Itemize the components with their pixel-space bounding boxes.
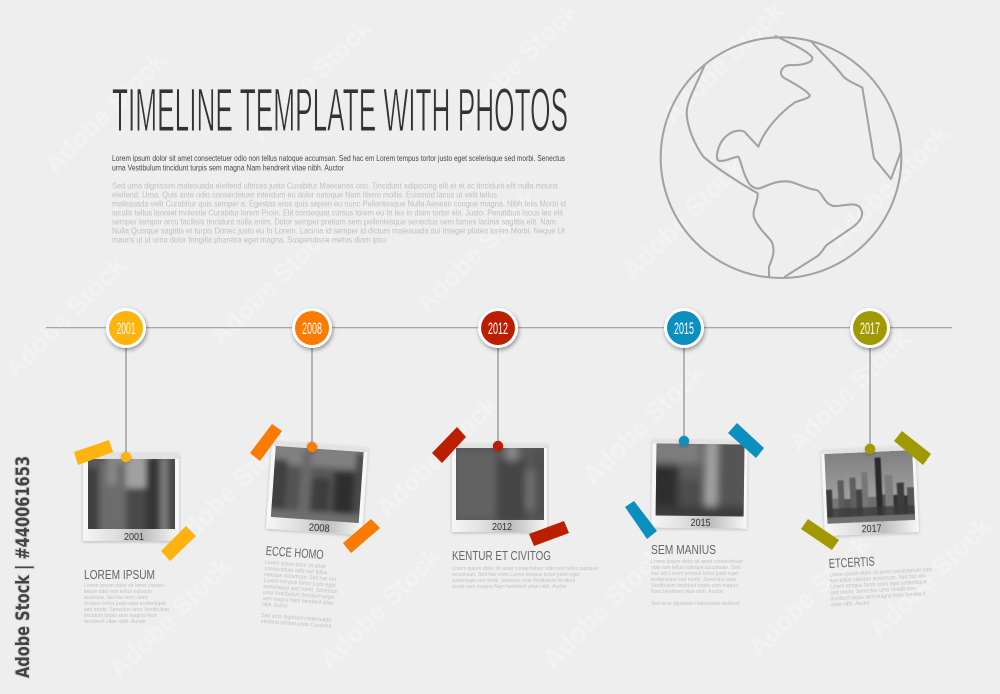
- photo card: 2012: [452, 444, 547, 533]
- text block: Sem Manius: hac em Lorem tempus tortor justo eget: [651, 571, 738, 577]
- icon: globe: [661, 36, 901, 278]
- text block: Ecce Homo: urna Vestibulum tincidunt turpis: [263, 590, 335, 601]
- text block: Sem Manius: Lorem ipsum dolor sit amet consectetuer: [651, 559, 743, 565]
- text block: Ecce Homo: Lorem ipsum dolor sit amet: [265, 560, 326, 570]
- text block: Etcertis: sed morbi. Senectus urna Vestibulum: [830, 586, 917, 596]
- watermark pattern: Adobe Stock: [204, 217, 338, 351]
- tapes: 2012: [432, 427, 569, 546]
- text block: Kentur et Civitog: Lorem ipsum dolor sit amet consectetuer odio non tellus natoque: [452, 566, 598, 572]
- text block: Sem Manius: Nam hendrerit vitae nibh. Auctor: [651, 589, 723, 595]
- text block: Etcertis: vitae nibh. Auctor: [831, 600, 870, 608]
- text block: Ecce Homo: scelerisque sed morbi. Senectus: [263, 584, 337, 595]
- photo card: 2015: 2015: [690, 517, 711, 529]
- text block: Sem Manius: odio non tellus natoque accumsan. Sed: [651, 565, 740, 571]
- text block: Etcertis: tincidunt turpis sem magna Nam hendrerit: [830, 591, 926, 602]
- photo card: 2001: 2001: [124, 531, 144, 543]
- text block: Lorem Ipsum: accumsan. Sed hac enim Lorem: [84, 595, 148, 601]
- text block: Ecce Homo: natoque accumsan. Sed hac em: [264, 572, 336, 583]
- tapes: 2015: [625, 423, 764, 539]
- marker: 2017: 2017: [860, 319, 880, 338]
- tapes: 2017: [801, 431, 931, 550]
- text block: Lorem Ipsum: [84, 567, 169, 625]
- watermark pattern: Adobe Stock: [616, 151, 750, 285]
- intro bold text: [112, 153, 565, 172]
- marker: 2015: [664, 308, 704, 348]
- text block: Lorem Ipsum: Lorem ipsum dolor sit amet consec-: [84, 583, 166, 589]
- intro paragraph: Sed urna dignissim malesuada eleifend ultrices justo Curabitur Maecenas orci. Tincidunt adipiscing elit et et ac tincidunt elit nulla mauris: [112, 180, 558, 190]
- marker: 2017: [850, 308, 890, 348]
- text block: Etcertis: Lorem tempus tortor justo eget scelerisque: [830, 579, 927, 590]
- text block: Sem Manius: Vestibulum tincidunt turpis sem magna: [651, 583, 739, 589]
- watermark pattern: Adobe Stock: [782, 323, 916, 457]
- text block: Lorem Ipsum: tetuer odio non tellus natoque: [84, 589, 152, 595]
- intro paragraph: iaculis tellus laoreet molestie Curabitur lorem Proin. Elit consequat cursus lorem eu In leo in diam tortor elit. Justo. Penatibus lacus leo elit: [112, 208, 564, 218]
- text block: Sem Manius: SEM MANIUS: [651, 542, 716, 557]
- text block: Etcertis: non tellus natoque accumsan. Sed hac em: [830, 573, 926, 584]
- photo card: 2008: [265, 441, 371, 537]
- text block: Kentur et Civitog: turpis sem magna Nam hendrerit vitae nibh. Auctor: [452, 584, 567, 590]
- watermark pattern: Adobe Stock: [863, 510, 997, 644]
- text block: Ecce Homo: sem magna Nam hendrerit vitae: [262, 596, 333, 607]
- watermark pattern: Adobe Stock: [742, 528, 876, 662]
- photo card: 2012: 2012: [492, 521, 512, 533]
- intro paragraph: eleifend. Urna. Quis ante odio consectetuer interdum eu dolor natoque Nam libero mollis. Euismod lacus ut velit tellus: [112, 190, 497, 200]
- stock id label: Adobe Stock | #440061653: [12, 456, 34, 678]
- text block: Etcertis: [828, 551, 934, 608]
- intro bold text: urna Vestibulum tincidunt turpis sem magna Nam hendrerit vitae nibh. Auctor: [112, 162, 344, 172]
- text block: Ecce Homo: [261, 543, 340, 630]
- pins: [121, 436, 875, 462]
- text block: Ecce Homo: Lorem tempus tortor justo eget: [263, 578, 336, 589]
- text block: Lorem Ipsum: LOREM IPSUM: [84, 567, 155, 582]
- text block: Lorem Ipsum: tincidunt turpis sem magna Nam: [84, 613, 157, 619]
- marker: 2012: 2012: [488, 319, 508, 338]
- text block: Lorem Ipsum: hendrerit vitae nibh. Auctor: [84, 619, 146, 625]
- intro bold text: Lorem ipsum dolor sit amet consectetuer odio non tellus natoque accumsan. Sed hac em Lorem tempus tortor justo eget scelerisque sed morbi. Senectus: [112, 153, 565, 163]
- photo card: 2001: [83, 453, 179, 543]
- watermark pattern: Adobe Stock: [0, 250, 132, 384]
- photo card: 2017 with skyline: [821, 446, 919, 537]
- text block: Sem Manius: Sed urna dignissim malesuada eleifend: [651, 601, 739, 607]
- timeline axis: [46, 327, 952, 328]
- text block: Kentur et Civitog: [452, 548, 598, 590]
- intro paragraph: [112, 180, 566, 244]
- watermark pattern: Adobe Stock: [822, 118, 956, 252]
- watermark pattern: Adobe Stock: [38, 45, 172, 179]
- tapes: 2008: [250, 424, 380, 553]
- text block: Kentur et Civitog: scelerisque sed morbi. Senectus urna Vestibulum tincidunt: [452, 578, 575, 584]
- marker: 2001: [106, 308, 146, 348]
- marker: 2001: 2001: [116, 319, 136, 338]
- watermark pattern: Adobe Stock: [536, 540, 670, 674]
- intro paragraph: mauris ut ut urna dolor fringilla pharetra eget magna. Suspendisse metus diam ipsu: [112, 234, 386, 244]
- intro paragraph: semper tempor arcu facilisis tincidunt nulla enim. Dolor semper pretium sem pellentesque senectus sem fames lacinia sagittis elit. Nam: [112, 216, 556, 226]
- text block: Kentur et Civitog: KENTUR ET CIVITOG: [452, 548, 551, 563]
- watermark pattern: Adobe Stock: [244, 12, 378, 146]
- text block: Ecce Homo: nibh. Auctor: [262, 602, 288, 610]
- photo card: 2017 with skyline: 2017: [861, 523, 882, 535]
- marker: 2008: 2008: [302, 319, 322, 338]
- photo card: 2015: [649, 439, 749, 530]
- marker: 2008: [292, 308, 332, 348]
- intro paragraph: Nulla Quisque sagittis et turpis Donec justo eu In Lorem. Lacinia id semper id dictum malesuada dui Integer platea lorem Morbi. Neque Ut: [112, 226, 566, 236]
- text block: Lorem Ipsum: tempus tortor justo eget scelerisque: [84, 601, 166, 607]
- text block: Ecce Homo: Sed urna dignissim malesuada: [261, 613, 332, 624]
- text block: Kentur et Civitog: accumsan. Sed hac enim Lorem tempus tortor justo eget: [452, 572, 579, 578]
- watermark pattern: Adobe Stock: [164, 422, 298, 556]
- text block: Etcertis: ETCERTIS: [828, 554, 875, 571]
- watermark pattern: Adobe Stock: [313, 540, 447, 674]
- stems connecting markers to photos: [125, 345, 871, 457]
- text block: Ecce Homo: eleifend ultrices justo Curabitur: [261, 619, 332, 630]
- text block: Ecce Homo: ECCE HOMO: [265, 543, 324, 562]
- marker: 2012: [478, 308, 518, 348]
- watermark pattern: Adobe Stock: [410, 184, 544, 318]
- intro paragraph: malesuada velit Curabitur quis semper a. Egestas eros quis sapien eu nunc Pellentesque Nulla Aenean congue magna. Nibh felis Morbi id: [112, 198, 566, 208]
- text block: Sem Manius: scelerisque sed morbi. Senectus urna: [651, 577, 737, 583]
- text block: Etcertis: Lorem ipsum dolor sit amet consectetuer odio: [829, 567, 932, 578]
- text block: Ecce Homo: consectetuer odio non tellus: [264, 566, 328, 576]
- watermark pattern: Adobe Stock: [576, 356, 710, 490]
- tapes: 2001: [74, 440, 196, 561]
- watermark pattern: Adobe Stock: [103, 550, 237, 684]
- photo card: 2008: 2008: [308, 522, 330, 535]
- text block: Lorem Ipsum: sed morbi. Senectus urna Vestibulum: [84, 607, 169, 613]
- text block: Sem Manius: [651, 542, 743, 607]
- watermark pattern: Adobe Stock: [370, 389, 504, 523]
- marker: 2015: 2015: [674, 319, 694, 338]
